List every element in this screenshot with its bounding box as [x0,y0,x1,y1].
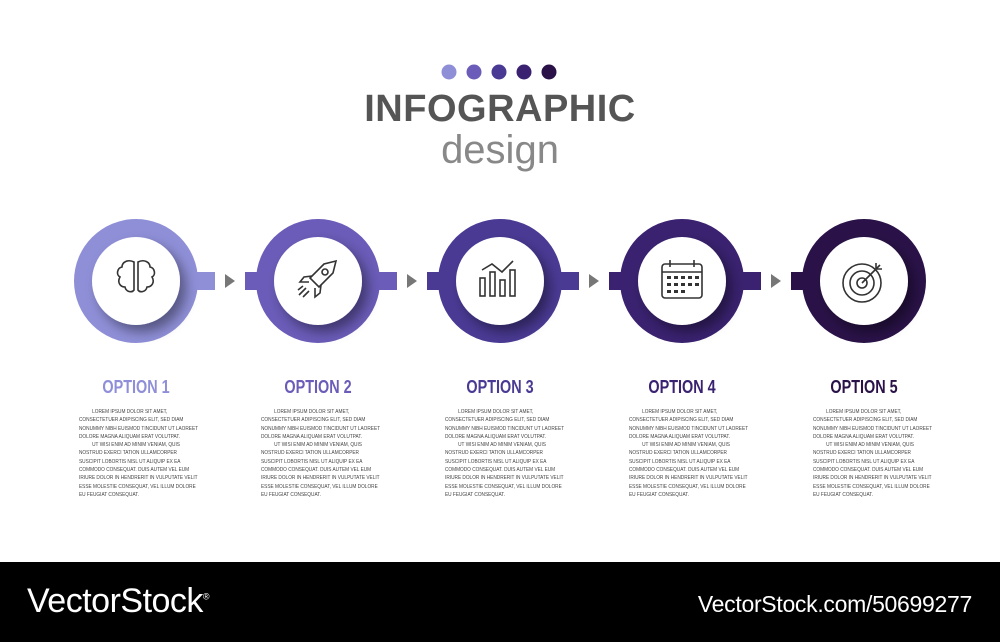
circle 5 [802,219,926,343]
text: OPTION 4 [648,377,716,397]
text: OPTION 2 [284,377,352,397]
text 4: UT WISI ENIM AD MINIM VENIAM, QUIS NOSTRUD EXERCI TATION ULLAMCORPER SUSCIPIT LOBORTIS NISL UT ALIQUIP EX EA COMMODO CONSEQUAT. DUIS AUTEM VEL EUM IRIURE DOLOR IN HENDRERIT IN VULPUTATE VELIT ESSE MOLESTIE CONSEQUAT, VEL ILLUM DOLORE EU FEUGIAT CONSEQUAT. [629,442,748,498]
text 3: LOREM IPSUM DOLOR SIT AMET, CONSECTETUER ADIPISCING ELIT, SED DIAM NONUMMY NIBH EUISMOD TINCIDUNT UT LAOREET DOLORE MAGNA ALIQUAM ERAT VOLUTPAT. [445,409,564,440]
text 5: UT WISI ENIM AD MINIM VENIAM, QUIS NOSTRUD EXERCI TATION ULLAMCORPER SUSCIPIT LOBORTIS NISL UT ALIQUIP EX EA COMMODO CONSEQUAT. DUIS AUTEM VEL EUM IRIURE DOLOR IN HENDRERIT IN VULPUTATE VELIT ESSE MOLESTIE CONSEQUAT, VEL ILLUM DOLORE EU FEUGIAT CONSEQUAT. [813,442,932,498]
text 1: UT WISI ENIM AD MINIM VENIAM, QUIS NOSTRUD EXERCI TATION ULLAMCORPER SUSCIPIT LOBORTIS NISL UT ALIQUIP EX EA COMMODO CONSEQUAT. DUIS AUTEM VEL EUM IRIURE DOLOR IN HENDRERIT IN VULPUTATE VELIT ESSE MOLESTIE CONSEQUAT, VEL ILLUM DOLORE EU FEUGIAT CONSEQUAT. [79,442,198,498]
text 2 [261,409,380,498]
text 4: LOREM IPSUM DOLOR SIT AMET, CONSECTETUER ADIPISCING ELIT, SED DIAM NONUMMY NIBH EUISMOD TINCIDUNT UT LAOREET DOLORE MAGNA ALIQUAM ERAT VOLUTPAT. [629,409,748,440]
footer bar [0,562,1000,642]
text 3: UT WISI ENIM AD MINIM VENIAM, QUIS NOSTRUD EXERCI TATION ULLAMCORPER SUSCIPIT LOBORTIS NISL UT ALIQUIP EX EA COMMODO CONSEQUAT. DUIS AUTEM VEL EUM IRIURE DOLOR IN HENDRERIT IN VULPUTATE VELIT ESSE MOLESTIE CONSEQUAT, VEL ILLUM DOLORE EU FEUGIAT CONSEQUAT. [445,442,564,498]
text: OPTION 5 [830,377,898,397]
circle 3 [438,219,562,343]
text 3 [445,409,564,498]
text 5 [813,409,932,498]
text: OPTION 3 [466,377,534,397]
text 1: LOREM IPSUM DOLOR SIT AMET, CONSECTETUER ADIPISCING ELIT, SED DIAM NONUMMY NIBH EUISMOD TINCIDUNT UT LAOREET DOLORE MAGNA ALIQUAM ERAT VOLUTPAT. [79,409,198,440]
connectors [180,272,821,290]
title: design [441,128,559,172]
circle 4 [620,219,744,343]
footer bar: VectorStock® [27,582,209,620]
footer bar: VectorStock.com/50699277 [698,591,972,617]
text 5: LOREM IPSUM DOLOR SIT AMET, CONSECTETUER ADIPISCING ELIT, SED DIAM NONUMMY NIBH EUISMOD TINCIDUNT UT LAOREET DOLORE MAGNA ALIQUAM ERAT VOLUTPAT. [813,409,932,440]
text 2: LOREM IPSUM DOLOR SIT AMET, CONSECTETUER ADIPISCING ELIT, SED DIAM NONUMMY NIBH EUISMOD TINCIDUNT UT LAOREET DOLORE MAGNA ALIQUAM ERAT VOLUTPAT. [261,409,380,440]
circle 2 [256,219,380,343]
text 1 [79,409,198,498]
title [364,88,636,172]
text 4 [629,409,748,498]
text 2: UT WISI ENIM AD MINIM VENIAM, QUIS NOSTRUD EXERCI TATION ULLAMCORPER SUSCIPIT LOBORTIS NISL UT ALIQUIP EX EA COMMODO CONSEQUAT. DUIS AUTEM VEL EUM IRIURE DOLOR IN HENDRERIT IN VULPUTATE VELIT ESSE MOLESTIE CONSEQUAT, VEL ILLUM DOLORE EU FEUGIAT CONSEQUAT. [261,442,380,498]
option labels: OPTION 1 [102,377,170,397]
dots [442,64,556,80]
title: INFOGRAPHIC [364,88,636,130]
circle 1 [74,219,198,343]
timeline [74,219,926,343]
arrows [225,274,781,288]
